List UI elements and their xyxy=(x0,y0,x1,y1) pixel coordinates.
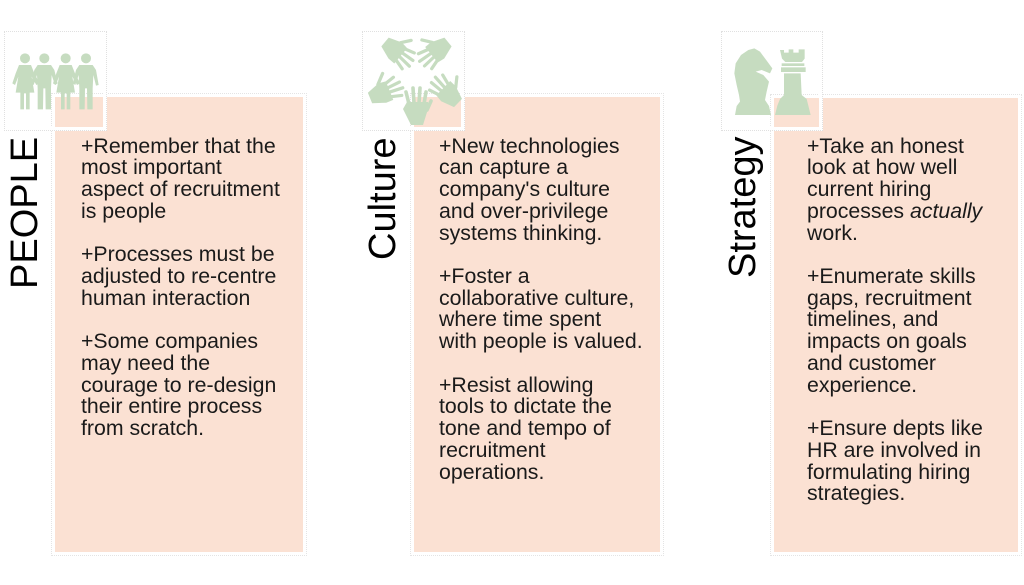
panel: culture xyxy=(414,97,660,552)
text block: people points: from scratch. xyxy=(81,416,204,440)
icon frame: people xyxy=(4,31,107,131)
text block: people points: may need the xyxy=(81,351,210,375)
text block: culture points: +Foster a xyxy=(439,264,530,288)
text block: people points: adjusted to re-centre xyxy=(81,264,276,288)
text block: culture points xyxy=(439,134,643,484)
text block: strategy points: experience. xyxy=(807,373,917,397)
text block: culture points: and over-privilege xyxy=(439,199,608,223)
text block: culture points: operations. xyxy=(439,460,544,484)
text block: people points: courage to re-design xyxy=(81,373,276,397)
text block: strategy points: +Ensure depts like xyxy=(807,416,983,440)
text block: culture points: +Resist allowing xyxy=(439,373,593,397)
text block: culture points: company's culture xyxy=(439,177,610,201)
text block: culture points: tools to dictate the xyxy=(439,394,612,418)
heading: Culture: Culture xyxy=(362,138,404,260)
text block: strategy points: gaps, recruitment xyxy=(807,286,972,310)
text block: strategy points: formulating hiring xyxy=(807,460,970,484)
heading: Strategy: Strategy xyxy=(722,136,764,278)
text block: culture points: where time spent xyxy=(439,307,601,331)
text block: culture points: systems thinking. xyxy=(439,221,602,245)
text block: culture points: +New technologies xyxy=(439,134,620,158)
text block: strategy points: +Enumerate skills xyxy=(807,264,976,288)
text block: culture points: with people is valued. xyxy=(439,329,643,353)
text block: people points: is people xyxy=(81,199,166,223)
text block: people points: their entire process xyxy=(81,394,262,418)
text block: people points: +Processes must be xyxy=(81,242,275,266)
text block: strategy points: processes actually xyxy=(807,199,982,223)
text block: culture points: can capture a xyxy=(439,155,568,179)
icon: people group xyxy=(12,53,99,110)
text block: people points: most important xyxy=(81,155,222,179)
text block: strategy points xyxy=(807,134,984,505)
text block: strategy points: HR are involved in xyxy=(807,438,981,462)
heading: PEOPLE: PEOPLE xyxy=(4,137,46,289)
text block: people points: +Remember that the xyxy=(81,134,276,158)
text block: strategy points: strategies. xyxy=(807,481,905,505)
text block: people points: aspect of recruitment xyxy=(81,177,280,201)
icon: five hands xyxy=(368,38,462,125)
text block: strategy points: +Take an honest xyxy=(807,134,964,158)
icon frame: strategy xyxy=(721,31,823,131)
text block: culture points: collaborative culture, xyxy=(439,286,634,310)
text block: strategy points: work. xyxy=(807,221,858,245)
text block: people points xyxy=(81,134,280,440)
icon frame: culture xyxy=(362,31,465,131)
text block: people points: human interaction xyxy=(81,286,250,310)
icon: chess knight and rook xyxy=(734,48,811,115)
text block: strategy points: timelines, and xyxy=(807,307,938,331)
panel: people xyxy=(55,97,303,552)
text block: strategy points: and customer xyxy=(807,351,936,375)
text block: strategy points: current hiring xyxy=(807,177,931,201)
text block: people points: +Some companies xyxy=(81,329,258,353)
text block: culture points: recruitment xyxy=(439,438,546,462)
text block: strategy points: impacts on goals xyxy=(807,329,967,353)
text block: culture points: tone and tempo of xyxy=(439,416,611,440)
panel: strategy xyxy=(774,98,1018,552)
text block: strategy points: look at how well xyxy=(807,155,957,179)
